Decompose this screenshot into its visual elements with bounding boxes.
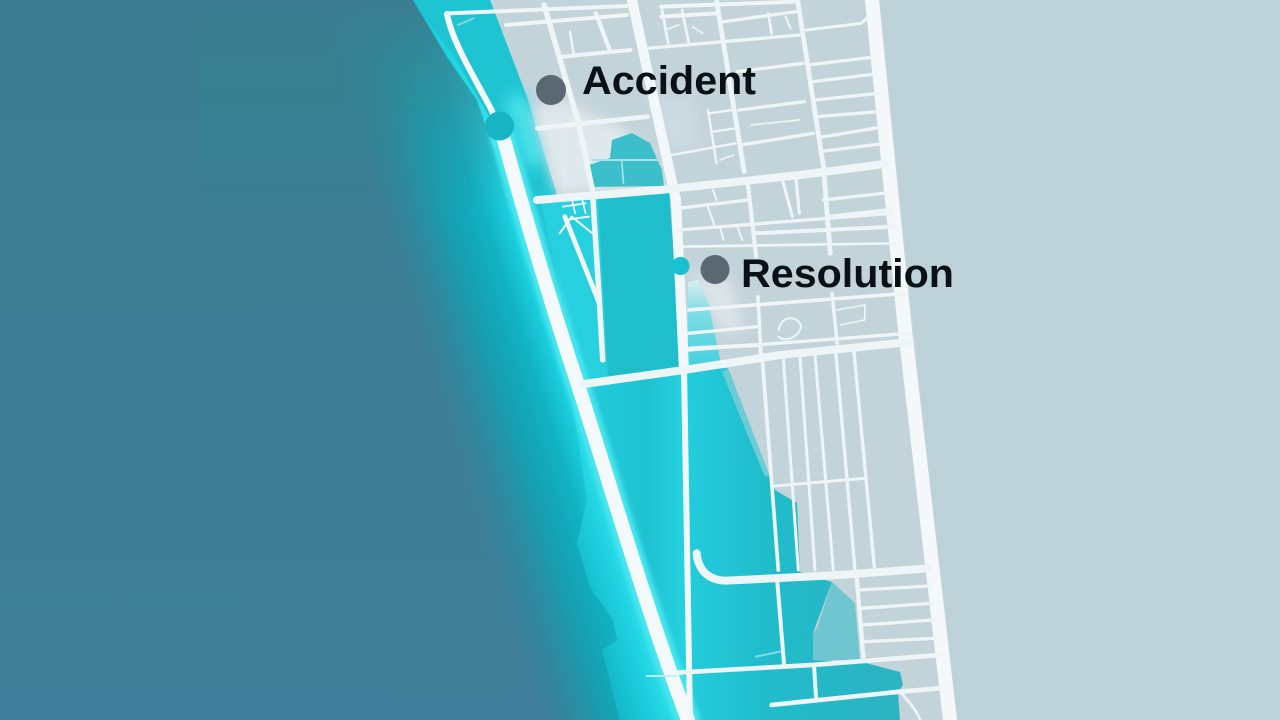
curved road bbox=[697, 553, 928, 581]
main coastal road bbox=[447, 14, 500, 128]
streets lower (reference zoom coordinates) bbox=[647, 343, 940, 720]
cross road 1 bbox=[537, 164, 885, 200]
inland teal bbox=[688, 368, 903, 720]
coastal glow bbox=[200, 0, 720, 720]
middle avenue bbox=[684, 370, 690, 720]
upper block grid below cross road bbox=[748, 182, 756, 257]
panel: ocean bbox=[0, 0, 720, 720]
lower block grid near resolution bbox=[689, 293, 906, 310]
teal block bbox=[596, 188, 682, 376]
light teal shore near resolution bbox=[688, 280, 722, 372]
large lower block bbox=[585, 372, 700, 720]
right boundary road bbox=[872, 0, 950, 720]
panel: land blocks bbox=[413, 0, 955, 720]
streets upper (reference zoom coordinates) bbox=[448, 0, 910, 360]
panel: street network bbox=[447, 0, 950, 720]
bright spot by accident bbox=[505, 92, 545, 170]
road halo bbox=[500, 128, 688, 720]
panel: teal inland zones bbox=[540, 133, 903, 720]
label: Resolution: Resolution bbox=[741, 252, 954, 296]
pale shoreline band bbox=[722, 368, 770, 477]
marker: accident dot bbox=[536, 75, 566, 105]
marker: coastal teal dot bbox=[485, 112, 514, 140]
shallow water band bbox=[413, 0, 700, 720]
label: Accident: Accident bbox=[582, 59, 756, 103]
marker: resolution teal dot bbox=[672, 257, 690, 275]
upper teal pond bbox=[589, 133, 664, 187]
bright strip bbox=[540, 195, 608, 380]
cross road 2 bbox=[584, 342, 910, 384]
light teal pool bbox=[813, 582, 860, 660]
small roads by coast bbox=[560, 203, 592, 233]
marker: resolution dot bbox=[700, 255, 730, 284]
panel: right-hand background bbox=[640, 0, 1280, 720]
